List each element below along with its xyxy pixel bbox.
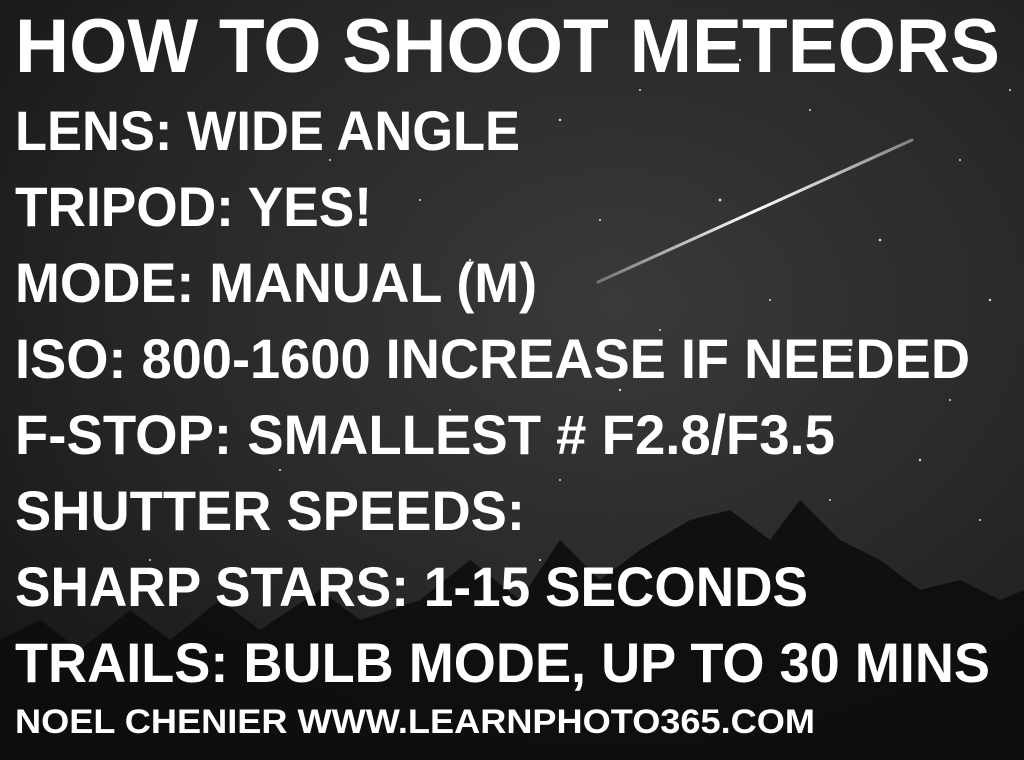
meteor streak xyxy=(598,140,912,282)
stars xyxy=(149,59,1011,561)
tripod: TRIPOD: YES! xyxy=(15,175,372,238)
iso: ISO: 800-1600 INCREASE IF NEEDED xyxy=(15,327,970,390)
f-stop: F-STOP: SMALLEST # F2.8/F3.5 xyxy=(15,403,835,466)
shutter speeds heading: SHUTTER SPEEDS: xyxy=(15,479,525,542)
mode: MODE: MANUAL (M) xyxy=(15,251,537,314)
settings list xyxy=(15,99,990,694)
lens: LENS: WIDE ANGLE xyxy=(15,99,520,162)
trails: TRAILS: BULB MODE, UP TO 30 MINS xyxy=(15,631,990,694)
tree silhouettes xyxy=(0,500,1024,760)
sharp stars: SHARP STARS: 1-15 SECONDS xyxy=(15,555,808,618)
title: HOW TO SHOOT METEORS xyxy=(15,4,1000,89)
footer credit: NOEL CHENIER WWW.LEARNPHOTO365.COM xyxy=(15,703,815,741)
